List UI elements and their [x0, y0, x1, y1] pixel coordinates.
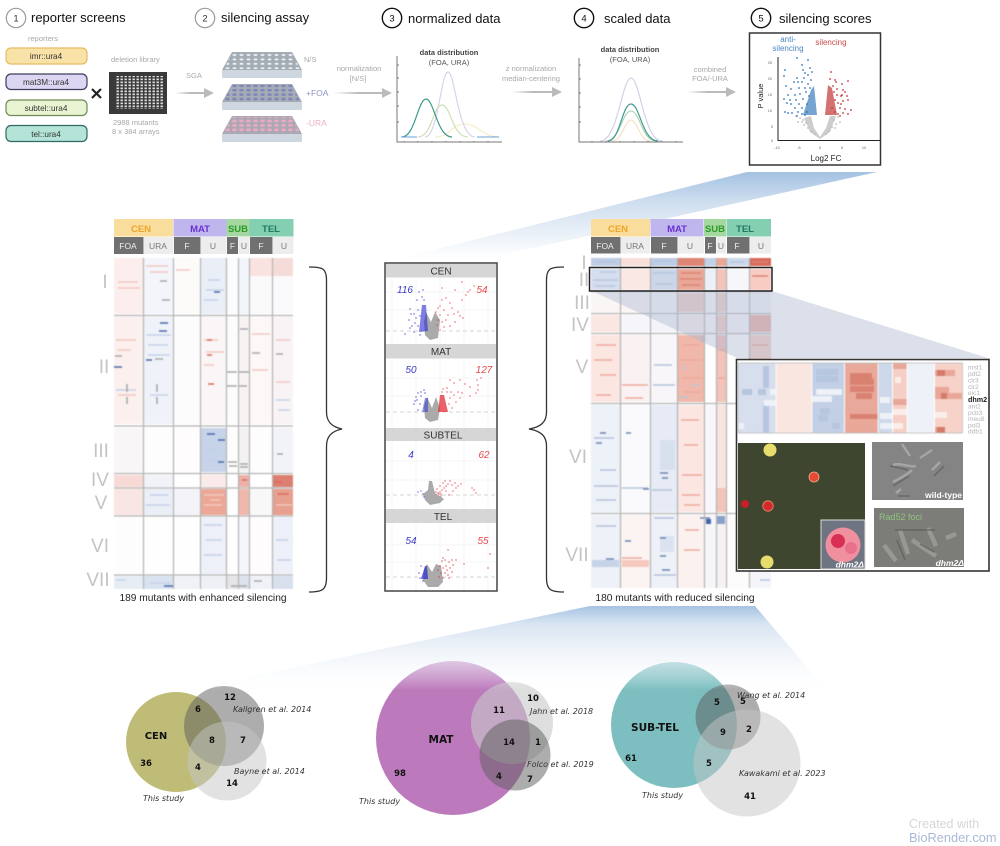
volcano panel: CEN: CEN: [430, 266, 452, 278]
venn: CEN: 4: [195, 763, 201, 773]
venn: CEN: This study: [143, 794, 184, 803]
bracket: left-facing: [529, 267, 564, 592]
panel: volcano plot silencing scores: 5: [771, 125, 773, 129]
right heatmap column headers: U: [718, 241, 724, 251]
heatmap cells: [114, 258, 293, 589]
chart: scaled data distribution: [579, 45, 683, 142]
venn: CEN: 6: [195, 705, 201, 715]
chart: scaled data distribution: (FOA, URA): [610, 55, 651, 64]
venn: MAT: Folco et al. 2019: [527, 760, 594, 769]
funnel: cluster set to venn diagrams: [175, 606, 825, 692]
volcano panel: SUBTEL: 4: [408, 450, 414, 461]
arrow: SGA: SGA: [186, 71, 202, 80]
reporter strain list: tel::ura4: [31, 130, 61, 139]
step 5: silencing scores heading: silencing scores: [779, 11, 872, 26]
venn: SUB-TEL: 5: [706, 759, 712, 769]
panel: volcano plot silencing scores: 25: [768, 61, 772, 65]
left heatmap cluster labels: [86, 272, 110, 591]
gene labels: pcb3: [968, 410, 983, 417]
venn: SUB-TEL: This study: [642, 791, 683, 800]
micrograph: Rad52 foci: [874, 508, 964, 568]
venn: MAT: [359, 661, 594, 815]
arrow: normalization: [334, 64, 392, 98]
venn: CEN: 7: [240, 736, 246, 746]
reporter strain list: subtel::ura4: [25, 104, 68, 113]
funnel: highlighted cluster to zoom panel: [592, 291, 988, 358]
venn: CEN: 12: [224, 693, 236, 703]
right heatmap cluster labels: III: [574, 293, 590, 314]
right heatmap cluster labels: II: [579, 270, 589, 291]
venn: MAT: MAT: [429, 734, 454, 746]
assay plate -URA: [222, 116, 327, 142]
volcano panel: MAT: [386, 344, 496, 422]
venn: MAT: 10: [527, 694, 539, 704]
step 4: scaled data heading: scaled data: [604, 11, 671, 26]
panel: volcano plot silencing scores: -5: [797, 146, 801, 150]
left heatmap cluster labels: III: [93, 441, 109, 462]
volcano panel: TEL: 54: [405, 536, 417, 547]
cross symbol: [92, 89, 101, 98]
step 4: scaled data heading: [574, 8, 671, 28]
arrow: z normalization: median-centering: [502, 74, 560, 83]
assay plate N/S: [222, 52, 317, 78]
heatmap column headers: TEL: [262, 224, 280, 235]
volcano panel: TEL: [386, 509, 496, 587]
panel: volcano plots by region: [385, 263, 497, 591]
arrow: combined: FOA/-URA: [692, 74, 728, 83]
panel: volcano plot silencing scores: 0: [819, 146, 821, 150]
venn: MAT: 14: [503, 738, 515, 748]
heatmap column headers: F: [230, 241, 235, 251]
heatmap column headers: URA: [149, 241, 167, 251]
arrow: SGA: [175, 71, 214, 98]
right heatmap cluster labels: I: [581, 253, 587, 274]
venn: CEN: 36: [140, 759, 152, 769]
step 2: silencing assay heading: silencing assay: [221, 10, 310, 25]
step 4: scaled data heading: 4: [581, 14, 587, 24]
panel: volcano plot silencing scores: 0: [771, 139, 773, 143]
volcano panel: SUBTEL: 62: [478, 450, 490, 461]
colony plate photo: [738, 443, 865, 570]
step 5: silencing scores heading: 5: [758, 14, 764, 24]
gene labels: ddb1: [968, 428, 983, 436]
venn: MAT: This study: [359, 797, 400, 806]
right heatmap column headers: TEL: [736, 224, 754, 235]
step 1: reporter screens heading: 1: [13, 14, 19, 24]
heatmap column headers: CEN: [131, 224, 151, 235]
step 2: silencing assay heading: [195, 8, 310, 28]
venn: SUB-TEL: 5: [714, 698, 720, 708]
step 3: normalized data heading: 3: [389, 14, 395, 24]
right heatmap cells: [591, 258, 771, 588]
deletion library plate: 2988 mutants: [113, 118, 159, 127]
detail heatmap: [738, 363, 962, 433]
chart: normalized data distribution: data distribution: [420, 48, 479, 57]
volcano panel: TEL: TEL: [434, 512, 453, 523]
gene labels: [968, 364, 987, 436]
arrow: normalization: [N/S]: [350, 74, 366, 83]
panel: volcano plot silencing scores: 20: [768, 77, 772, 81]
left heatmap cluster labels: V: [95, 493, 108, 514]
venn: CEN: [126, 686, 311, 803]
step 3: normalized data heading: [382, 8, 501, 28]
caption: enhanced silencing: 189 mutants with enhanced silencing: [119, 593, 287, 604]
step 2: silencing assay heading: 2: [202, 14, 208, 24]
deletion library plate: 8 x 384 arrays: [112, 127, 160, 136]
watermark: Created with: [909, 817, 979, 831]
arrow: combined: combined: [694, 65, 726, 74]
venn: CEN: Kallgren et al. 2014: [233, 705, 311, 714]
venn: SUB-TEL: 2: [746, 725, 752, 735]
panel: volcano plot silencing scores: 5: [841, 146, 843, 150]
venn: SUB-TEL: Wang et al. 2014: [737, 691, 805, 700]
gene labels: meu8: [968, 416, 985, 423]
venn: MAT: 7: [527, 775, 533, 785]
venn: SUB-TEL: 41: [744, 792, 756, 802]
volcano panel: MAT: MAT: [431, 347, 451, 358]
chart: normalized data distribution: (FOA, URA): [429, 58, 470, 67]
venn: MAT: 98: [394, 769, 406, 779]
gene labels: clr3: [968, 378, 979, 384]
right heatmap cluster labels: VII: [565, 545, 589, 566]
micrograph: wild-type: [872, 442, 963, 500]
right heatmap cluster labels: V: [576, 357, 589, 378]
right heatmap column headers: CEN: [608, 224, 628, 235]
panel: volcano plot silencing scores: P value: [756, 84, 765, 108]
left heatmap: enhanced silencing: [86, 219, 294, 591]
right heatmap column headers: MAT: [667, 224, 687, 235]
venn: MAT: Jahn et al. 2018: [528, 707, 593, 716]
venn: MAT: 11: [493, 706, 505, 716]
volcano panel: SUBTEL: [386, 428, 496, 505]
volcano panel: CEN: 116: [397, 285, 413, 296]
right heatmap cluster labels: IV: [571, 315, 589, 336]
venn: SUB-TEL: 5: [740, 697, 746, 707]
right heatmap column headers: [591, 219, 771, 254]
assay plate N/S: N/S: [304, 55, 317, 64]
right heatmap column headers: URA: [626, 241, 644, 251]
right heatmap column headers: F: [661, 241, 667, 251]
panel: cluster II detail: [736, 360, 989, 571]
panel: volcano plot silencing scores: silencing: [772, 44, 804, 53]
heatmap column headers: [114, 219, 294, 254]
venn: CEN: 8: [209, 736, 215, 746]
panel: volcano plot silencing scores: -10: [774, 146, 780, 150]
micrograph: Rad52 foci: Rad52 foci: [879, 512, 922, 522]
assay plate -URA: -URA: [306, 118, 327, 128]
venn: SUB-TEL: [611, 662, 826, 816]
deletion library plate: [109, 55, 167, 136]
venn: CEN: 14: [226, 779, 238, 789]
right heatmap column headers: FOA: [596, 241, 614, 251]
right heatmap column headers: U: [758, 241, 764, 251]
volcano panel: MAT: 50: [405, 365, 417, 376]
highlight box on cluster II: [590, 268, 772, 291]
venn: CEN: Bayne et al. 2014: [234, 767, 305, 776]
micrograph: Rad52 foci: dhm2Δ: [936, 558, 964, 568]
volcano panel: CEN: [386, 264, 496, 340]
reporter strain list: imr::ura4: [30, 52, 63, 61]
venn: SUB-TEL: 9: [720, 728, 726, 738]
panel: volcano plot silencing scores: silencing: [815, 38, 847, 47]
right heatmap column headers: F: [707, 241, 713, 251]
venn: SUB-TEL: 61: [625, 754, 637, 764]
arrow: z normalization: z normalization: [506, 64, 556, 73]
gene labels: mst1: [968, 364, 983, 372]
volcano panel: MAT: 127: [476, 365, 493, 376]
heatmap column headers: U: [210, 241, 216, 251]
micrograph: wild-type: wild-type: [924, 490, 962, 500]
panel: volcano plot silencing scores: 10: [768, 109, 772, 113]
watermark: [909, 817, 996, 845]
gene labels: eic1: [968, 390, 980, 397]
left heatmap cluster labels: VI: [91, 536, 109, 557]
venn: SUB-TEL: Kawakami et al. 2023: [739, 769, 826, 778]
heatmap column headers: FOA: [119, 241, 137, 251]
heatmap column headers: U: [281, 241, 287, 251]
right heatmap cluster labels: [565, 253, 590, 566]
assay plate +FOA: +FOA: [306, 88, 329, 98]
venn: MAT: 1: [535, 738, 541, 748]
volcano panel: SUBTEL: SUBTEL: [424, 430, 463, 442]
heatmap column headers: MAT: [190, 224, 210, 235]
step 1: reporter screens heading: [6, 8, 126, 28]
left heatmap cluster labels: II: [99, 357, 109, 378]
right heatmap column headers: F: [734, 241, 740, 251]
gene labels: ant2: [968, 404, 981, 410]
heatmap column headers: F: [258, 241, 264, 251]
heatmap column headers: F: [184, 241, 190, 251]
bracket: right-facing: [309, 267, 342, 592]
volcano panel: CEN: 54: [476, 285, 488, 296]
panel: volcano plot silencing scores: anti-: [780, 35, 796, 44]
assay plate +FOA: [222, 84, 329, 110]
venn: MAT: 4: [496, 772, 502, 782]
panel: volcano plot silencing scores: Log2 FC: [811, 154, 842, 163]
gene labels: dhm2: [968, 395, 987, 404]
watermark: BioRender.com: [909, 830, 996, 845]
funnel: scores to volcano plots: [385, 172, 877, 262]
arrow: combined: [687, 65, 736, 97]
panel: volcano plot silencing scores: [750, 33, 880, 165]
reporter strain list: reporters: [28, 34, 58, 43]
reporter strain list: [6, 34, 87, 142]
heatmap column headers: SUB: [228, 224, 248, 235]
chart: scaled data distribution: data distribution: [601, 45, 660, 54]
panel: volcano plot silencing scores: 15: [768, 93, 772, 97]
left heatmap cluster labels: IV: [91, 470, 109, 491]
gene labels: pdt2: [968, 371, 981, 378]
volcano panel: TEL: 55: [477, 536, 489, 547]
right heatmap column headers: SUB: [705, 224, 725, 235]
arrow: z normalization: [502, 64, 562, 97]
panel: volcano plot silencing scores: 10: [862, 146, 866, 150]
step 5: silencing scores heading: [751, 8, 872, 28]
caption: reduced silencing: 180 mutants with reduced silencing: [595, 593, 755, 604]
venn: CEN: CEN: [145, 731, 167, 742]
gene labels: pol3: [968, 422, 981, 430]
step 1: reporter screens heading: reporter screens: [31, 10, 126, 25]
gene labels: clr2: [968, 384, 979, 391]
chart: normalized data distribution: [397, 48, 502, 142]
arrow: normalization: normalization: [337, 64, 381, 73]
right heatmap: reduced silencing: [565, 219, 771, 588]
right heatmap column headers: U: [687, 241, 693, 251]
reporter strain list: mat3M::ura4: [23, 78, 69, 87]
heatmap column headers: U: [241, 241, 247, 251]
colony inset: dhm2Δ: [836, 560, 864, 570]
left heatmap cluster labels: VII: [86, 570, 110, 591]
venn: SUB-TEL: SUB-TEL: [631, 722, 679, 734]
deletion library plate: deletion library: [111, 55, 160, 64]
left heatmap cluster labels: I: [102, 272, 108, 293]
step 3: normalized data heading: normalized data: [408, 11, 501, 26]
right heatmap cluster labels: VI: [569, 447, 587, 468]
